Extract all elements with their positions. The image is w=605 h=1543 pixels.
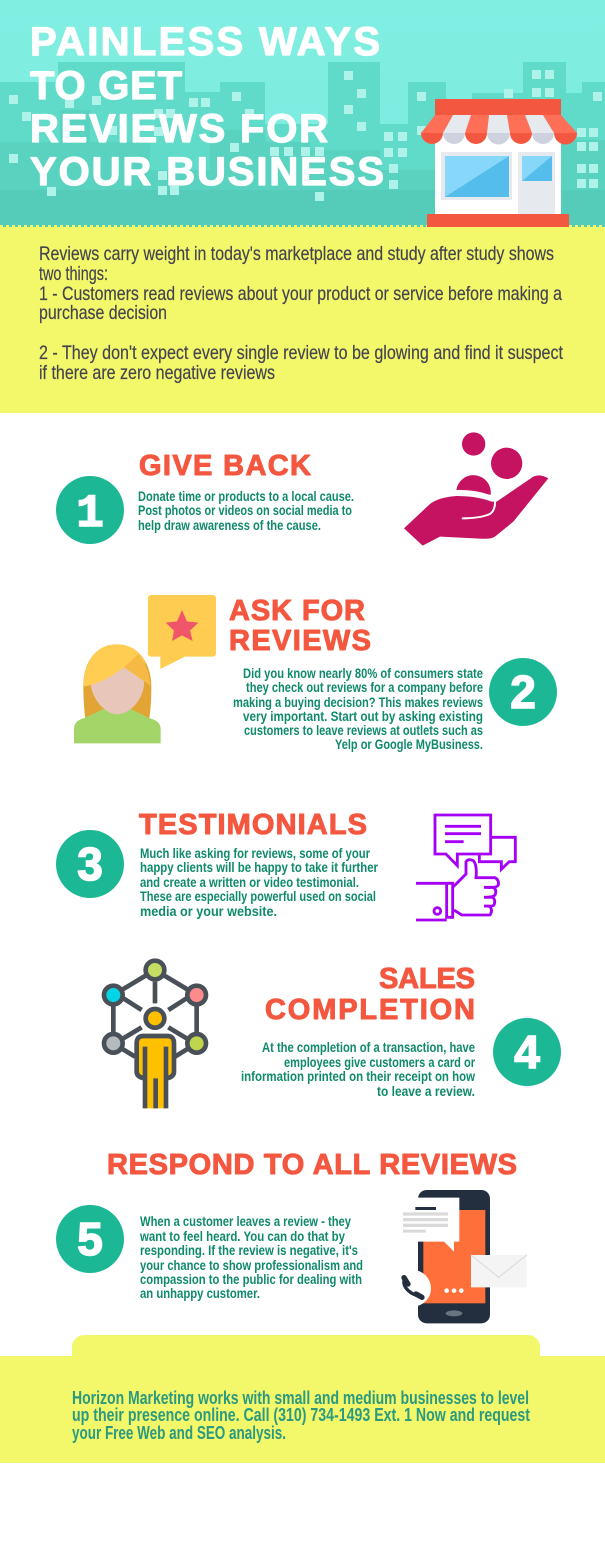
number badge 1: 1	[76, 488, 104, 540]
section 4: sales completion	[104, 961, 561, 1108]
heading: sales completion	[265, 963, 475, 1026]
heading: give back: GIVE BACK	[139, 450, 311, 482]
panel: introduction: if there are zero negative reviews	[39, 362, 275, 384]
text: ask for reviews	[233, 665, 483, 752]
text: ask for reviews: Did you know nearly 80% of consumers state	[243, 665, 483, 681]
text: ask for reviews: Yelp or Google MyBusiness.	[335, 736, 483, 752]
panel: introduction	[0, 226, 605, 413]
number badge 3: 3	[77, 838, 103, 890]
number badge 1	[56, 476, 124, 544]
text: sales completion: At the completion of a transaction, have	[262, 1039, 475, 1055]
text: sales completion: employees give customers a card or	[284, 1054, 475, 1070]
text: give back: help draw awareness of the cause.	[138, 517, 321, 533]
title: REVIEWS FOR	[30, 107, 328, 151]
text: sales completion: information printed on their receipt on how	[241, 1068, 475, 1084]
text: respond to all reviews: compassion to the public for dealing with	[140, 1271, 362, 1287]
panel: introduction: two things:	[39, 263, 108, 285]
panel: introduction: purchase decision	[39, 302, 167, 324]
heading: sales completion: COMPLETION	[265, 994, 475, 1026]
number badge 3	[56, 830, 124, 898]
text: testimonials	[140, 845, 378, 919]
number badge 2: 2	[510, 666, 536, 718]
number badge 4: 4	[514, 1026, 540, 1078]
text: ask for reviews: very important. Start out by asking existing	[243, 708, 483, 724]
title: YOUR BUSINESS	[30, 150, 384, 194]
number badge 5: 5	[77, 1213, 103, 1265]
text: testimonials: and create a written or video testimonial.	[140, 874, 359, 890]
text: respond to all reviews: an unhappy customer.	[140, 1285, 260, 1301]
section 3: testimonials	[56, 809, 515, 920]
icon: thumbs up with speech bubbles	[416, 815, 515, 920]
icon: woman with star speech bubble	[74, 595, 216, 743]
text: testimonials: Much like asking for reviews, some of your	[140, 845, 370, 861]
text: respond to all reviews	[139, 1213, 363, 1301]
heading: ask for reviews: ASK FOR	[229, 595, 365, 627]
icon: storefront	[421, 99, 577, 227]
number badge 2	[489, 658, 557, 726]
title: TO GET	[30, 64, 182, 108]
text: respond to all reviews: want to feel heard. You can do that by	[139, 1228, 345, 1244]
section 2: ask for reviews	[74, 595, 557, 752]
number badge 4	[493, 1018, 561, 1086]
panel: footer call to action	[0, 1335, 605, 1463]
text: testimonials: media or your website.	[140, 903, 277, 919]
section 5: respond to all reviews	[56, 1149, 527, 1323]
text: ask for reviews: customers to leave reviews at outlets such as	[244, 722, 483, 738]
title: PAINLESS WAYS	[30, 20, 380, 64]
section 1: give back	[56, 432, 548, 546]
text: sales completion: to leave a review.	[377, 1083, 475, 1099]
text: ask for reviews: making a buying decision? This makes reviews	[233, 694, 483, 710]
icon: person in network	[104, 961, 206, 1108]
heading: ask for reviews	[229, 595, 371, 657]
panel: header	[0, 0, 605, 227]
heading: testimonials: TESTIMONIALS	[139, 809, 367, 841]
text: give back: Donate time or products to a local cause.	[138, 488, 354, 504]
panel: footer call to action: your Free Web and SEO analysis.	[72, 1423, 286, 1443]
text: testimonials: happy clients will be happy to take it further	[140, 859, 378, 875]
text: respond to all reviews: responding. If the review is negative, it's	[140, 1242, 358, 1258]
text: give back	[138, 488, 354, 533]
text: sales completion	[241, 1039, 475, 1099]
title	[30, 20, 384, 194]
heading: ask for reviews: REVIEWS	[229, 625, 371, 657]
icon: smartphone with messages	[394, 1190, 527, 1323]
number badge 5	[56, 1205, 124, 1273]
heading: sales completion: SALES	[379, 963, 475, 995]
text: respond to all reviews: your chance to show professionalism and	[140, 1257, 363, 1273]
text: testimonials: These are especially powerful used on social	[140, 888, 376, 904]
text: respond to all reviews: When a customer leaves a review - they	[140, 1213, 351, 1229]
text: give back: Post photos or videos on social media to	[138, 502, 352, 518]
text: ask for reviews: they check out reviews for a company before	[246, 679, 483, 695]
icon: hand with coins	[404, 432, 548, 546]
heading: respond to all reviews: RESPOND TO ALL REVIEWS	[107, 1149, 517, 1181]
